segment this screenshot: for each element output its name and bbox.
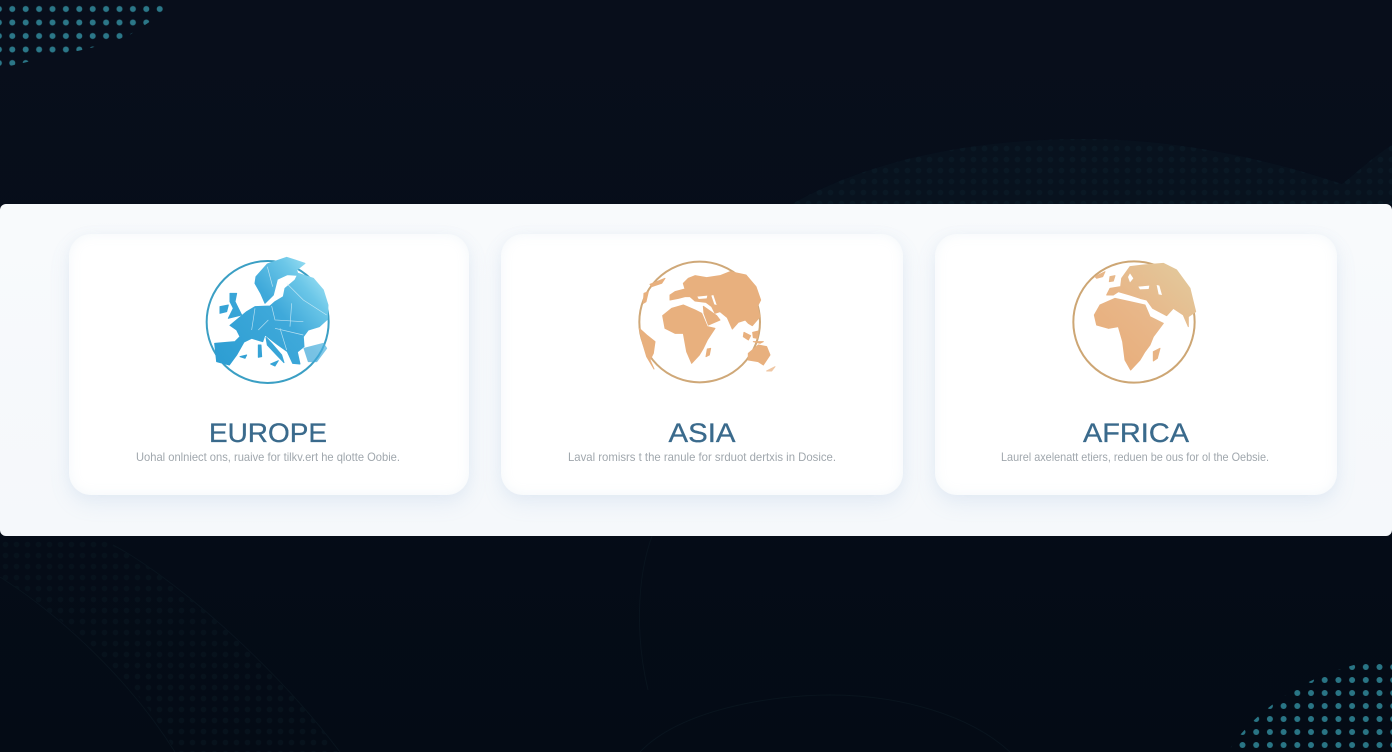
text: Africa caption: Laurel axelenatt etiers, reduen be ous for ol the Oebsie. — [1001, 450, 1269, 464]
heading: Asia: ASIA — [668, 418, 736, 448]
icon: Africa globe — [1073, 261, 1196, 383]
dots: top right faint — [792, 139, 1392, 204]
dots: bottom left faint — [0, 536, 340, 752]
text: Asia caption: Laval romisrs t the ranule for srduot dertxis in Dosice. — [568, 450, 836, 464]
text: Europe caption: Uohal onlniect ons, ruaive for tilkv.ert he qlotte Oobie. — [136, 450, 400, 464]
panel: Europe card — [69, 234, 469, 495]
heading: Africa: AFRICA — [1083, 418, 1189, 448]
dots: bottom right — [1228, 660, 1392, 752]
panel: white band — [0, 204, 1392, 536]
icon: Asia globe — [639, 262, 775, 382]
dots: top left — [0, 0, 176, 68]
faint arcs: bottom centre — [0, 536, 1010, 752]
panel: Asia card — [501, 234, 903, 495]
icon: Europe globe — [207, 257, 329, 383]
heading: Europe: EUROPE — [209, 418, 327, 448]
panel: Africa card — [935, 234, 1337, 495]
